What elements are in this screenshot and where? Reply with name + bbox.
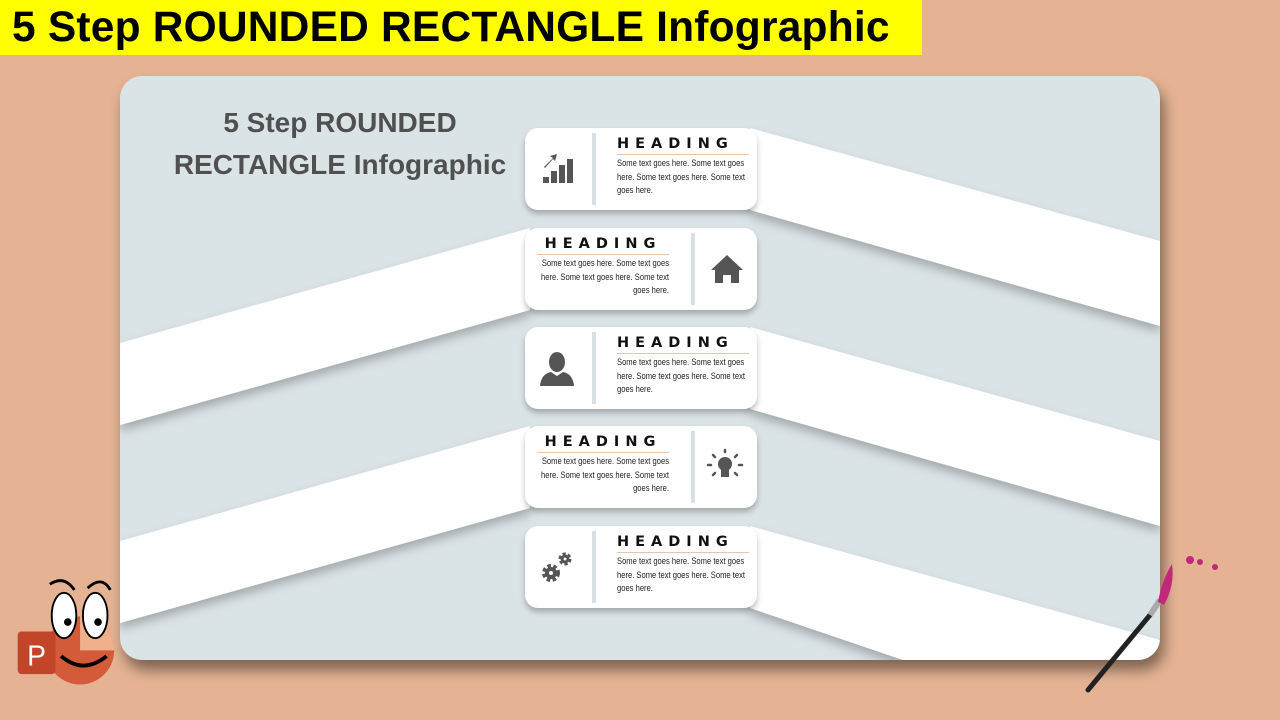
card 5: HEADING — [617, 534, 734, 550]
card 2: here. Some text goes here. Some text — [541, 272, 669, 282]
mascot: powerpoint face — [18, 579, 114, 684]
card 2: HEADING — [545, 236, 661, 252]
icon: house — [711, 255, 743, 283]
icon: person — [540, 352, 574, 386]
panel — [120, 76, 1160, 660]
card 2 — [525, 228, 757, 310]
card 5 — [525, 526, 757, 608]
card 3: here. Some text goes here. Some text — [617, 370, 745, 382]
title bar: 5 Step ROUNDED RECTANGLE Infographic — [12, 4, 890, 51]
card 5: goes here. — [617, 583, 653, 594]
heading text: 5 Step ROUNDED — [223, 107, 457, 138]
diagonal bands — [120, 128, 1160, 660]
heading text: RECTANGLE Infographic — [174, 149, 506, 180]
icon: bulb — [706, 448, 744, 477]
card 4: Some text goes here. Some text goes — [542, 456, 669, 467]
icon: paintbrush — [1086, 556, 1218, 692]
card 2: Some text goes here. Some text goes — [542, 258, 669, 269]
card 5: Some text goes here. Some text goes — [617, 556, 744, 567]
card 2: goes here. — [633, 285, 669, 296]
card 4: goes here. — [633, 483, 669, 494]
card 1: goes here. — [617, 185, 653, 196]
card 3: goes here. — [617, 384, 653, 395]
mascot: powerpoint face: P — [27, 641, 46, 673]
card 3 — [525, 327, 757, 409]
card 3: Some text goes here. Some text goes — [617, 357, 744, 368]
card 4: here. Some text goes here. Some text — [541, 470, 669, 480]
icon: chart — [543, 154, 573, 183]
card 1 — [525, 128, 757, 210]
icon: gears — [542, 552, 572, 582]
card 1: here. Some text goes here. Some text — [617, 172, 745, 182]
card 4: HEADING — [545, 434, 661, 450]
card 5: here. Some text goes here. Some text — [617, 570, 745, 580]
heading text — [174, 107, 506, 180]
card 1: HEADING — [617, 136, 734, 152]
card 3: HEADING — [617, 335, 734, 351]
card 1: Some text goes here. Some text goes — [617, 158, 744, 169]
card 4 — [525, 426, 757, 508]
